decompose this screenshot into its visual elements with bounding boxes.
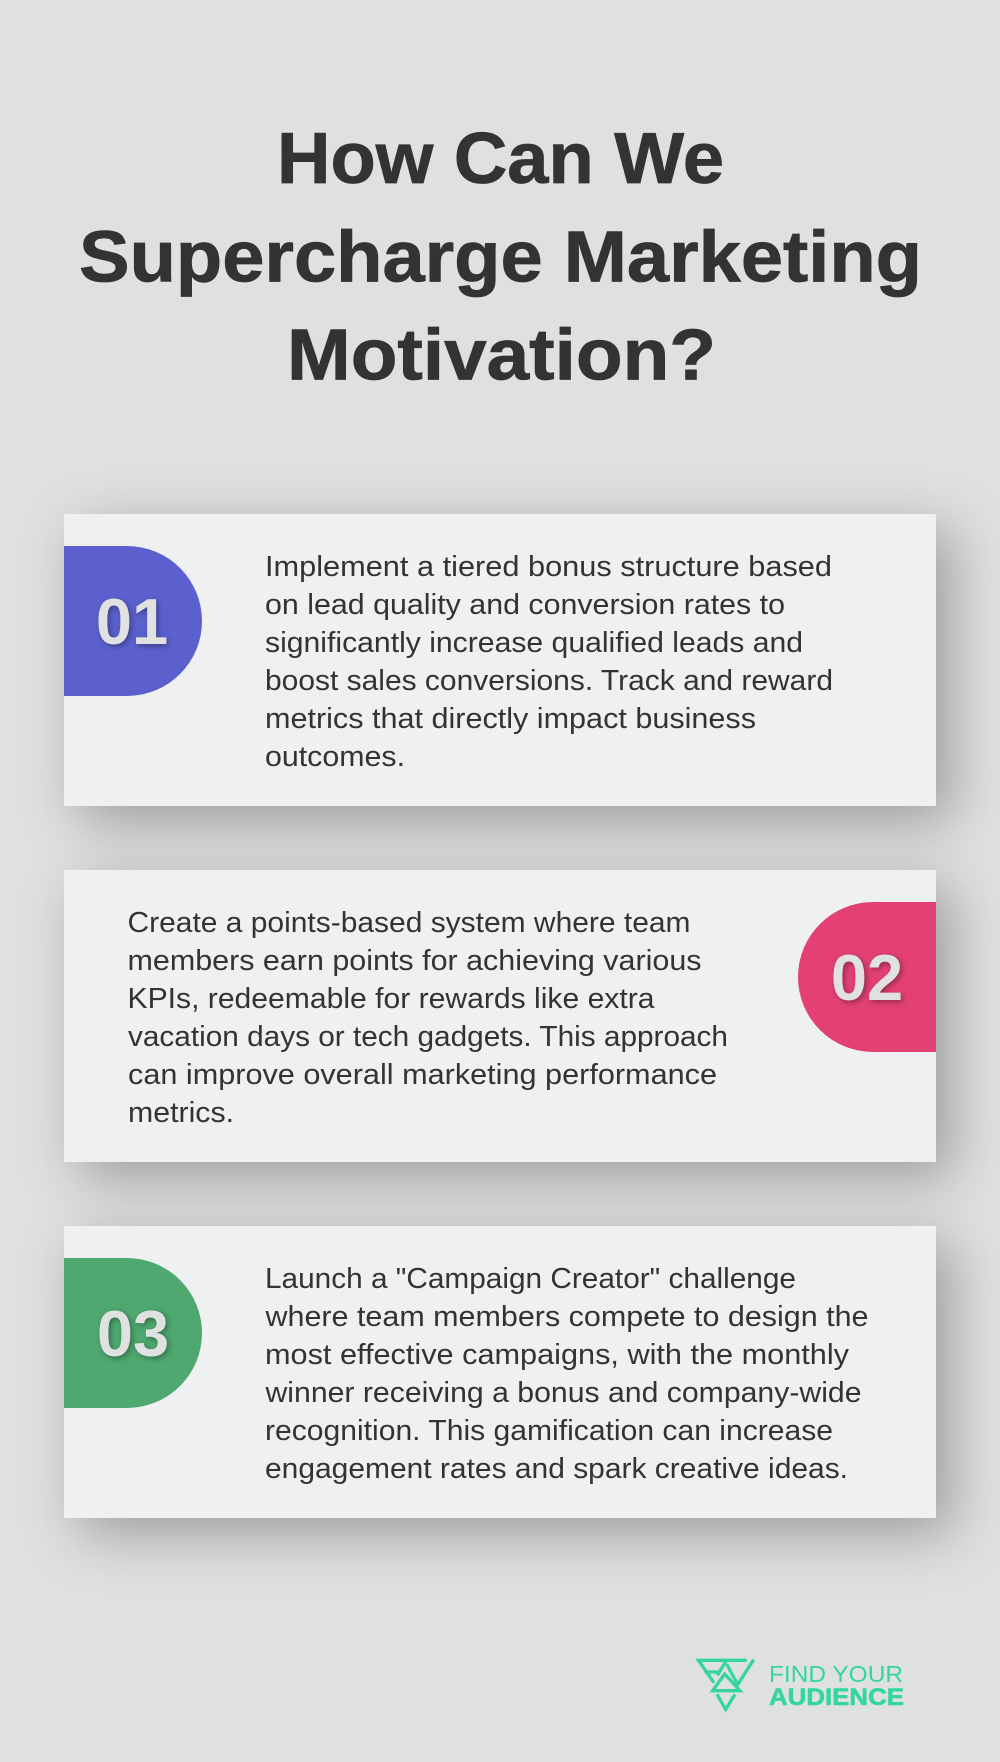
badge: 03: 03 [97,1297,169,1370]
panel: card 02 [64,870,936,1162]
text block: card 03: winner receiving a bonus and company-wide [264,1377,861,1409]
text block: card 02: metrics. [128,1097,234,1129]
logo text: FIND YOUR [769,1661,903,1687]
badge: 02: 02 [831,941,903,1014]
panel: card 01 [64,514,936,806]
badge: 03 [64,1258,202,1408]
badge: 02 [798,902,936,1052]
text block: card 02: Create a points-based system where team [128,907,690,939]
logo text: AUDIENCE [769,1684,904,1711]
icon: triangle mark [698,1660,754,1709]
badge: 01 [64,546,202,696]
text block: card 01: Implement a tiered bonus structure based [265,551,832,583]
text block: card 03: engagement rates and spark creative ideas. [265,1453,848,1485]
text block: card 01: metrics that directly impact business [265,703,756,735]
text block: card 03: most effective campaigns, with the monthly [265,1339,850,1371]
text block: card 02: members earn points for achieving various [128,945,702,977]
text block: card 02: KPIs, redeemable for rewards like extra [128,983,655,1015]
text block: card 02: can improve overall marketing performance [128,1059,717,1091]
title: Motivation? [287,316,716,396]
text block: card 01: on lead quality and conversion rates to [265,589,785,621]
text block: card 02: vacation days or tech gadgets. This approach [128,1021,728,1053]
text block: card 01: outcomes. [265,741,405,773]
text block: card 01: significantly increase qualified leads and [265,627,803,659]
title [79,119,922,396]
logo text [769,1661,904,1711]
text block: card 03: recognition. This gamification can increase [265,1415,833,1447]
panel: card 03 [64,1226,936,1518]
text block: card 03: where team members compete to design the [264,1301,868,1333]
badge: 01: 01 [96,585,168,658]
text block: card 01: boost sales conversions. Track and reward [265,665,833,697]
title: How Can We [277,119,724,199]
text block: card 03: Launch a "Campaign Creator" challenge [265,1263,796,1295]
title: Supercharge Marketing [79,218,922,298]
